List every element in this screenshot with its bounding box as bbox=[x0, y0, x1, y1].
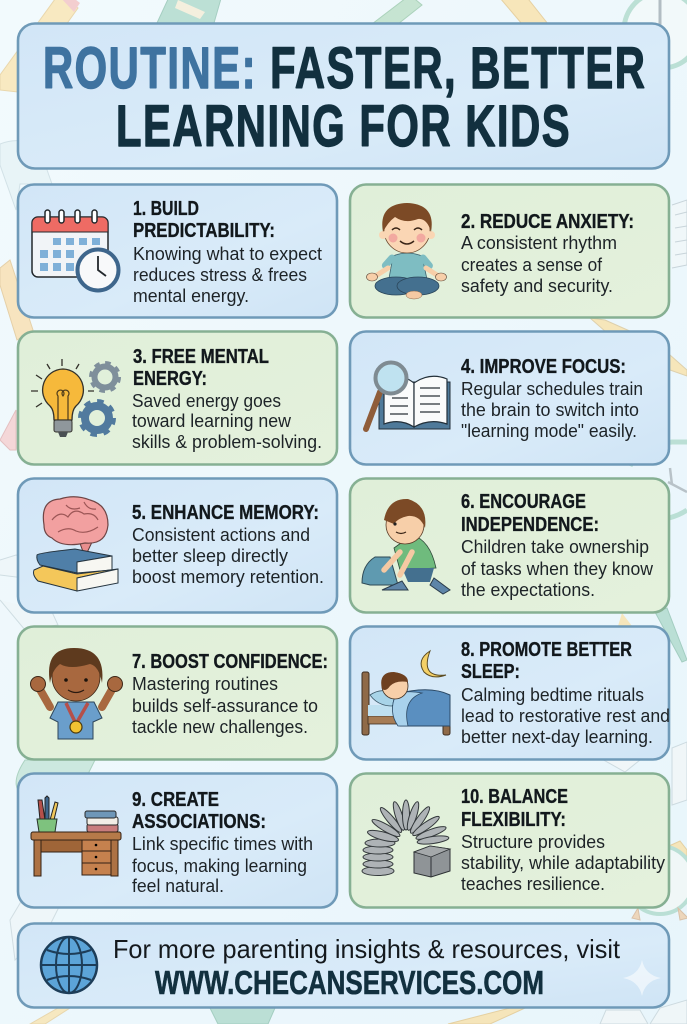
heading and text bbox=[461, 490, 654, 600]
footer panel bbox=[18, 924, 669, 1008]
sparkle mark bbox=[623, 960, 661, 996]
heading and text bbox=[132, 501, 324, 587]
heading and text: creates a sense of bbox=[461, 254, 603, 275]
heading and text: 8. PROMOTE BETTER bbox=[461, 638, 632, 661]
heading and text: safety and security. bbox=[461, 275, 613, 296]
panel: 7 boost confidence bbox=[18, 626, 337, 760]
heading and text: ENERGY: bbox=[133, 367, 207, 390]
heading and text: SLEEP: bbox=[461, 660, 520, 683]
icon: child sleeping in bed with moon bbox=[362, 651, 450, 735]
heading and text: builds self-assurance to bbox=[132, 695, 318, 716]
heading and text: Knowing what to expect bbox=[133, 243, 322, 264]
heading and text: PREDICTABILITY: bbox=[133, 219, 275, 242]
heading and text: toward learning new bbox=[132, 410, 292, 431]
heading and text: better next-day learning. bbox=[461, 726, 653, 747]
heading and text: INDEPENDENCE: bbox=[461, 513, 599, 536]
heading and text: 9. CREATE bbox=[132, 788, 219, 811]
heading and text: "learning mode" easily. bbox=[461, 420, 637, 441]
heading and text: 4. IMPROVE FOCUS: bbox=[461, 355, 626, 378]
title text line 1: ROUTINE: FASTER, BETTER bbox=[43, 35, 645, 101]
heading and text: ASSOCIATIONS: bbox=[132, 810, 266, 833]
icon: child with medal bbox=[30, 648, 122, 739]
heading and text: boost memory retention. bbox=[132, 566, 324, 587]
heading and text bbox=[461, 355, 643, 441]
heading and text: Structure provides bbox=[461, 831, 605, 852]
panel: 5 enhance memory bbox=[18, 478, 337, 612]
icon: child tying shoes bbox=[362, 499, 450, 594]
heading and text: tackle new challenges. bbox=[132, 716, 308, 737]
panel: 6 encourage independence bbox=[350, 478, 669, 612]
heading and text: 6. ENCOURAGE bbox=[461, 490, 586, 513]
footer website: WWW.CHECANSERVICES.COM bbox=[155, 964, 544, 1001]
heading and text: better sleep directly bbox=[132, 545, 289, 566]
heading and text bbox=[132, 788, 313, 896]
heading and text: 1. BUILD bbox=[133, 197, 199, 220]
heading and text bbox=[461, 210, 634, 296]
icon: calendar and clock bbox=[32, 210, 118, 290]
heading and text bbox=[461, 638, 670, 747]
heading and text bbox=[461, 785, 666, 894]
heading and text: Mastering routines bbox=[132, 673, 278, 694]
footer text: For more parenting insights & resources, visit bbox=[113, 934, 621, 964]
heading and text: stability, while adaptability bbox=[461, 852, 666, 873]
heading and text: Children take ownership bbox=[461, 536, 649, 557]
heading and text: of tasks when they know bbox=[461, 558, 654, 579]
heading and text: 2. REDUCE ANXIETY: bbox=[461, 210, 634, 233]
icon: slinky and block bbox=[362, 800, 450, 877]
panel: 2 reduce anxiety bbox=[350, 184, 669, 318]
heading and text: the expectations. bbox=[461, 579, 595, 600]
title panel bbox=[18, 24, 669, 168]
heading and text: Consistent actions and bbox=[132, 524, 310, 545]
heading and text bbox=[133, 197, 322, 306]
icon: globe bbox=[41, 937, 97, 993]
heading and text: 7. BOOST CONFIDENCE: bbox=[132, 650, 328, 673]
panel: 8 promote better sleep bbox=[350, 626, 670, 760]
heading and text: mental energy. bbox=[133, 285, 249, 306]
heading and text: feel natural. bbox=[132, 875, 224, 896]
icon: magnifying glass and open book bbox=[366, 362, 450, 429]
panel: 9 create associations bbox=[18, 774, 337, 908]
icon: brain on books bbox=[34, 497, 118, 591]
panel: 10 balance flexibility bbox=[350, 774, 669, 908]
heading and text: reduces stress & frees bbox=[133, 264, 307, 285]
heading and text: 3. FREE MENTAL bbox=[133, 345, 269, 368]
heading and text bbox=[132, 650, 328, 737]
heading and text: the brain to switch into bbox=[461, 399, 639, 420]
heading and text: Link specific times with bbox=[132, 833, 313, 854]
icon: meditating child bbox=[366, 203, 446, 299]
heading and text: skills & problem-solving. bbox=[132, 431, 322, 452]
panel: 1 build predictability bbox=[18, 184, 337, 318]
heading and text: teaches resilience. bbox=[461, 873, 605, 894]
heading and text: A consistent rhythm bbox=[461, 232, 617, 253]
heading and text: Regular schedules train bbox=[461, 378, 643, 399]
heading and text bbox=[132, 345, 322, 452]
panel: 3 free mental energy bbox=[18, 332, 337, 464]
heading and text: FLEXIBILITY: bbox=[461, 808, 566, 831]
title text line 2: LEARNING FOR KIDS bbox=[116, 93, 570, 159]
heading and text: Calming bedtime rituals bbox=[461, 684, 644, 705]
icon: light bulb and gears bbox=[31, 359, 119, 437]
panel: 4 improve focus bbox=[350, 332, 669, 464]
heading and text: 5. ENHANCE MEMORY: bbox=[132, 501, 319, 524]
heading and text: focus, making learning bbox=[132, 855, 307, 876]
heading and text: Saved energy goes bbox=[132, 390, 281, 411]
heading and text: 10. BALANCE bbox=[461, 785, 568, 808]
icon: desk with pencils and books bbox=[31, 796, 121, 876]
heading and text: lead to restorative rest and bbox=[461, 705, 670, 726]
